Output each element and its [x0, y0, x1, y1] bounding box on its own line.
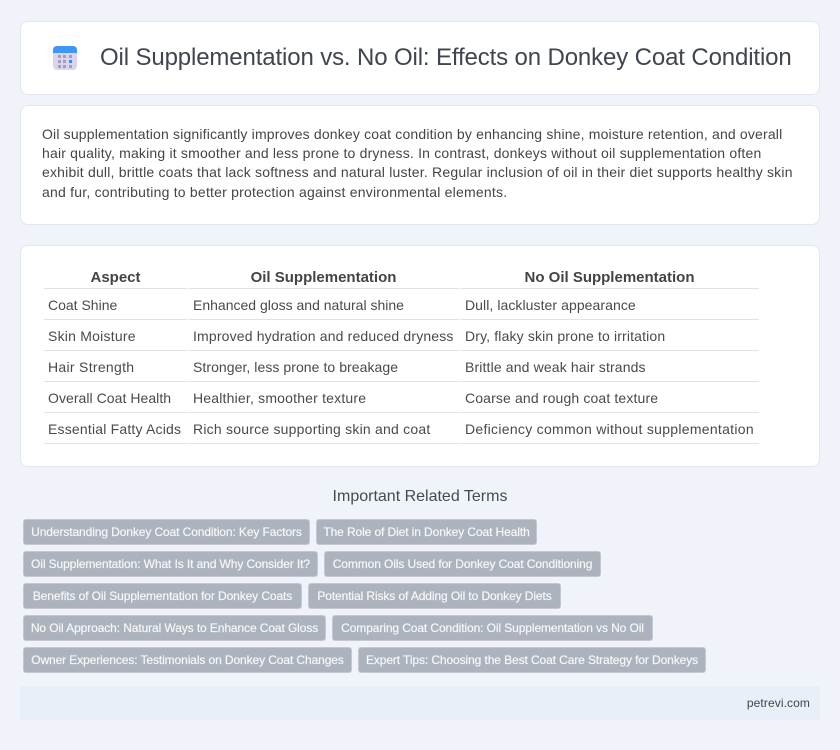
- row: essential fatty acids: Essential Fatty Acids: [48, 421, 181, 437]
- panel: header: [20, 21, 820, 95]
- panel: comparison table: Deficiency common without supplementation: [465, 421, 754, 437]
- panel: comparison table: Oil Supplementation: [251, 269, 396, 286]
- table header: Aspect: [90, 269, 141, 286]
- related term tags: Understanding Donkey Coat Condition: Key Factors: [31, 525, 302, 539]
- related term tags: Common Oils Used for Donkey Coat Conditioning: [333, 557, 592, 571]
- panel: comparison table: Stronger, less prone to breakage: [193, 359, 398, 375]
- panel: comparison table: Rich source supporting skin and coat: [193, 421, 430, 437]
- heading: related terms: Important Related Terms: [333, 488, 507, 505]
- related term tags: Potential Risks of Adding Oil to Donkey Diets: [317, 589, 552, 603]
- footer: [20, 686, 820, 720]
- panel: comparison table: Improved hydration and reduced dryness: [193, 328, 454, 344]
- title: Oil Supplementation vs. No Oil: Effects on Donkey Coat Condition: [100, 44, 792, 71]
- intro paragraph: hair quality, making it smoother and less prone to dryness. In contrast, donkeys without oil supplementation often: [42, 145, 761, 161]
- row: skin moisture: Skin Moisture: [48, 328, 136, 344]
- panel: comparison table: Coarse and rough coat texture: [465, 390, 658, 406]
- row: hair strength: Hair Strength: [48, 359, 134, 375]
- related term tags: Expert Tips: Choosing the Best Coat Care Strategy for Donkeys: [366, 653, 698, 667]
- intro paragraph: [42, 126, 793, 200]
- panel: comparison table: Dull, lackluster appearance: [465, 297, 636, 313]
- panel: intro text: [20, 105, 820, 225]
- related term tags: Owner Experiences: Testimonials on Donkey Coat Changes: [31, 653, 344, 667]
- related term tags: Benefits of Oil Supplementation for Donkey Coats: [33, 589, 292, 603]
- related term tags: Comparing Coat Condition: Oil Supplementation vs No Oil: [341, 621, 644, 635]
- related term tags: No Oil Approach: Natural Ways to Enhance Coat Gloss: [31, 621, 318, 635]
- intro paragraph: exhibit dull, brittle coats that lack softness and natural luster. Regular inclusion of oil in their diet supports healthy skin: [42, 164, 793, 180]
- panel: comparison table: Brittle and weak hair strands: [465, 359, 646, 375]
- panel: comparison table: Dry, flaky skin prone to irritation: [465, 328, 665, 344]
- row: coat shine: Coat Shine: [48, 297, 117, 313]
- icon: calendar: [53, 46, 77, 70]
- related term tags: Oil Supplementation: What Is It and Why Consider It?: [31, 557, 310, 571]
- intro paragraph: and fur, contributing to better protection against environmental elements.: [42, 184, 507, 200]
- panel: comparison table: No Oil Supplementation: [524, 269, 694, 286]
- intro paragraph: Oil supplementation significantly improves donkey coat condition by enhancing shine, moisture retention, and overall: [42, 126, 782, 142]
- panel: comparison table: Healthier, smoother texture: [193, 390, 366, 406]
- related term tags: The Role of Diet in Donkey Coat Health: [323, 525, 530, 539]
- related term tags: [23, 519, 706, 673]
- panel: comparison table: Enhanced gloss and natural shine: [193, 297, 404, 313]
- panel: comparison table: [20, 245, 820, 467]
- row: overall coat health: Overall Coat Health: [48, 390, 171, 406]
- footer source: petrevi.com: [747, 696, 810, 710]
